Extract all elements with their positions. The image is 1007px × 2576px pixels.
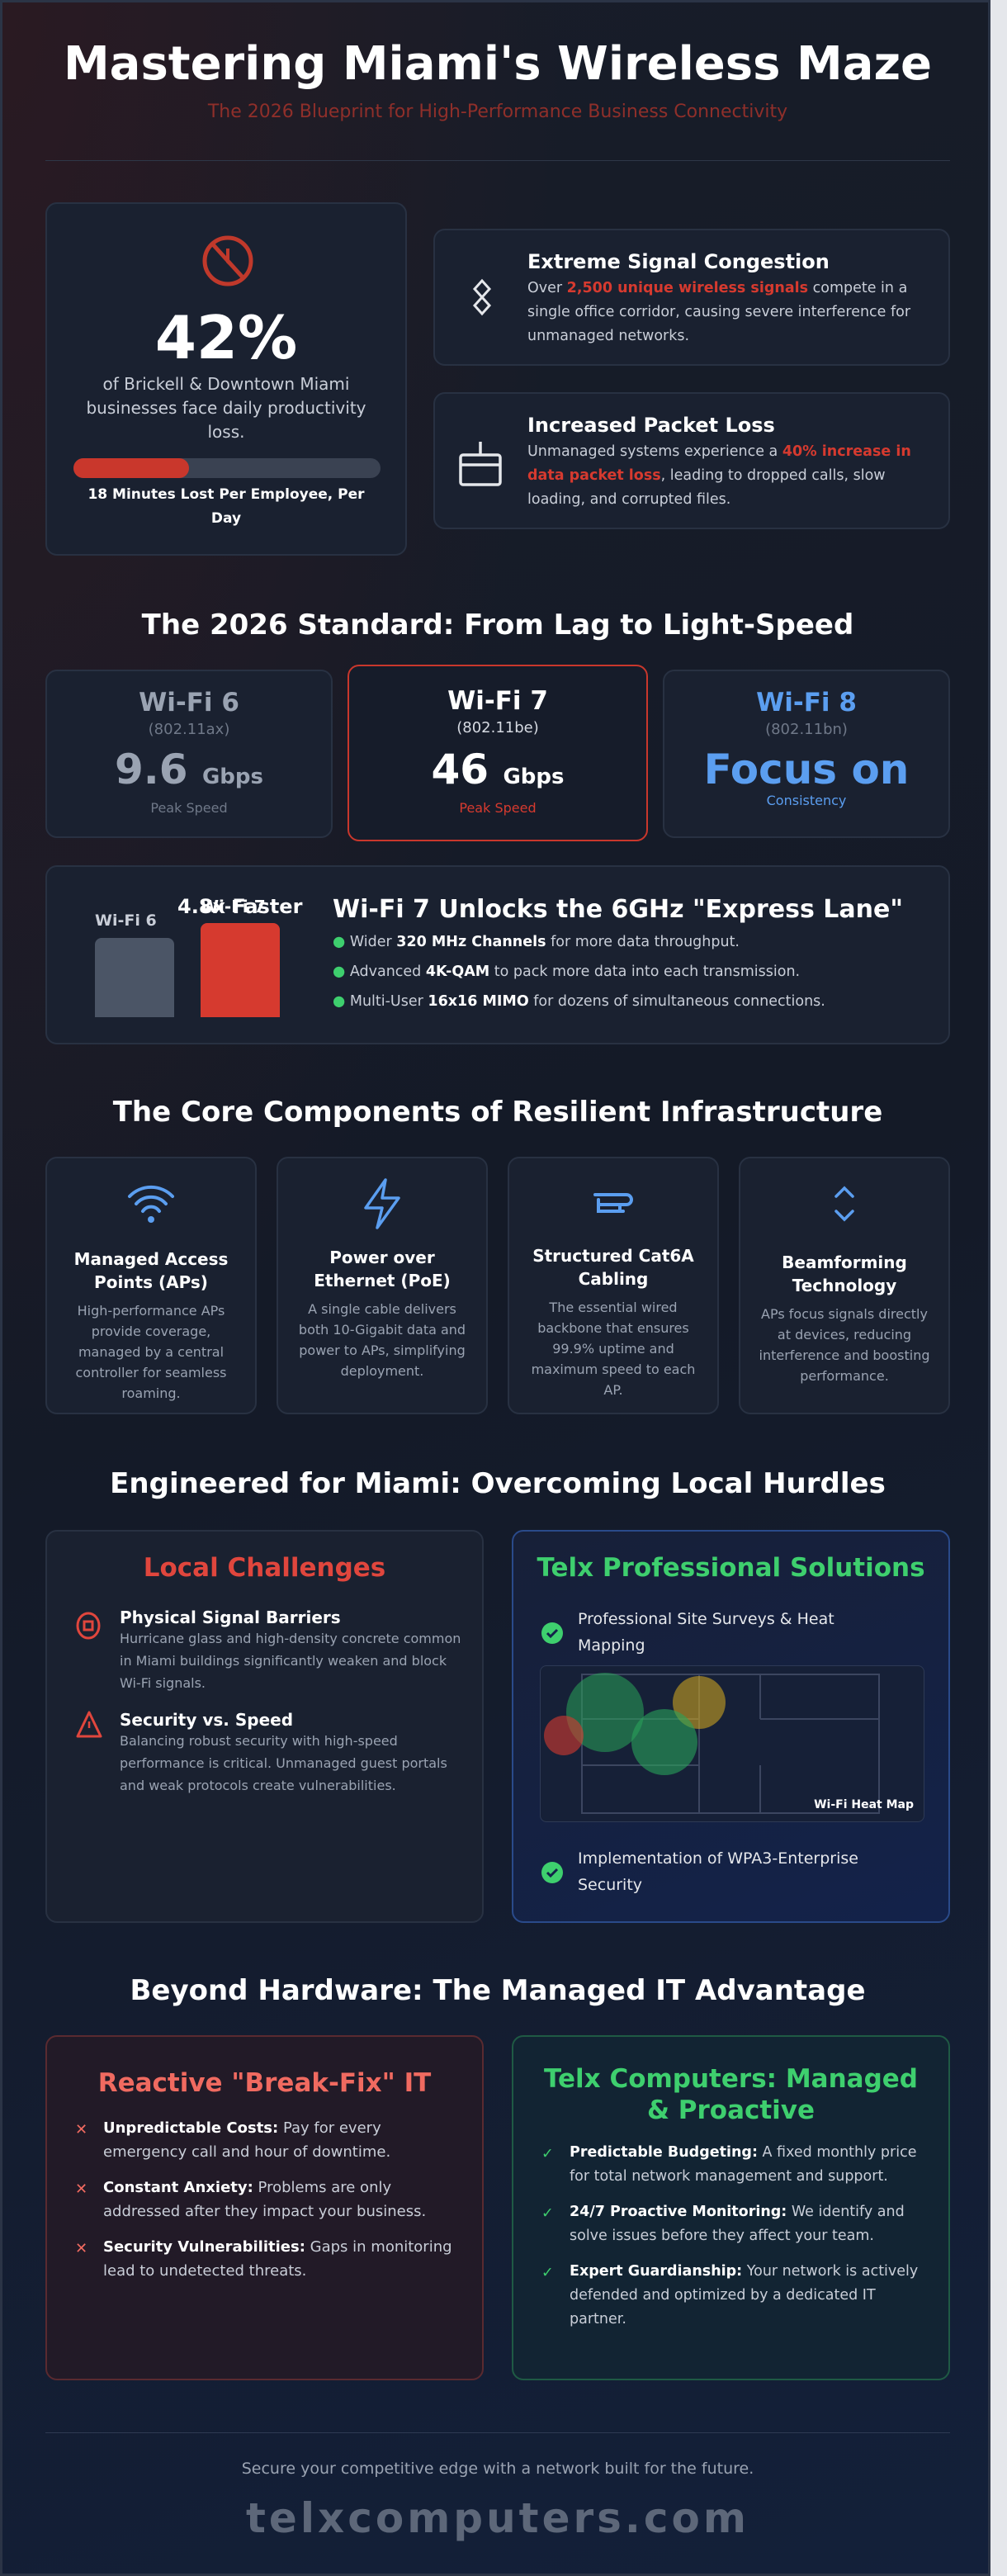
panel: telx solutions: [512, 1530, 950, 1923]
panel: packet loss: [433, 392, 950, 529]
icon: chevrons: [834, 1186, 854, 1222]
card: wifi 6: [45, 670, 333, 838]
card: access points: Managed Access Points (APs): [74, 1249, 228, 1292]
icon: no-clock: [203, 236, 253, 286]
list: break-fix issues: ✕: [75, 2240, 87, 2257]
card: wifi 8: Consistency: [767, 793, 846, 808]
challenge: security vs speed: [76, 1710, 447, 1793]
solution: WPA3: Implementation of WPA3-Enterprise Security: [578, 1849, 858, 1894]
challenge: physical barriers: [76, 1608, 461, 1691]
list: managed benefits: Predictable Budgeting: A fixed monthly price for total network management and support.: [570, 2144, 916, 2185]
card: PoE: A single cable delivers both 10-Gigabit data and power to APs, simplifying deployment.: [299, 1301, 466, 1379]
card: wifi 6: 9.6 Gbps: [115, 746, 263, 793]
card: wifi 8: [663, 670, 950, 838]
challenge: security vs speed: Security vs. Speed: [120, 1710, 293, 1730]
card: wifi 6: Wi-Fi 6: [139, 688, 239, 717]
card: wifi 7: [347, 665, 648, 841]
heading: engineered for miami: Engineered for Miami: Overcoming Local Hurdles: [110, 1467, 886, 1500]
panel: local challenges: Local Challenges: [144, 1553, 385, 1583]
express lane text: ● Advanced 4K-QAM to pack more data into each transmission.: [333, 964, 800, 980]
solution: site surveys: Professional Site Surveys & Heat Mapping: [578, 1610, 834, 1655]
subtitle: The 2026 Blueprint for High-Performance Business Connectivity: [208, 102, 787, 122]
card: wifi 6: (802.11ax): [149, 721, 229, 738]
icon: wifi: [127, 1186, 175, 1223]
list: break-fix issues: Security Vulnerabilities: Gaps in monitoring lead to undetected threats.: [103, 2238, 452, 2280]
list: break-fix issues: Constant Anxiety: Problems are only addressed after they impact your business.: [103, 2179, 426, 2220]
list: managed benefits: ✓: [541, 2146, 554, 2162]
panel: managed proactive: [512, 2035, 950, 2380]
list: break-fix issues: Unpredictable Costs: Pay for every emergency call and hour of downtime.: [103, 2119, 390, 2161]
panel: local challenges: [45, 1530, 484, 1923]
panel: telx solutions: Telx Professional Solutions: [537, 1553, 925, 1583]
footer url: telxcomputers.com: [246, 2494, 749, 2542]
express lane text: ● Multi-User 16x16 MIMO for dozens of simultaneous connections.: [333, 993, 825, 1010]
icon: signal: [473, 279, 491, 315]
list: managed benefits: [541, 2144, 918, 2327]
panel: signal congestion: [433, 229, 950, 366]
title: Mastering Miami's Wireless Maze: [64, 37, 932, 91]
bar chart: Wi-Fi 7: [201, 897, 266, 916]
panel: managed proactive: Telx Computers: Managed: [544, 2064, 918, 2094]
card: beamforming: Beamforming Technology: [782, 1252, 907, 1295]
card: wifi 7: Peak Speed: [459, 800, 537, 816]
heading: 2026 standard: The 2026 Standard: From Lag to Light-Speed: [142, 608, 853, 642]
panel: express lane: [45, 865, 950, 1044]
card: wifi 8: Wi-Fi 8: [756, 688, 857, 717]
card: cabling: [508, 1157, 719, 1414]
bar chart: [95, 895, 302, 1017]
challenge: physical barriers: Physical Signal Barriers: [120, 1608, 341, 1627]
heat map: [540, 1665, 924, 1822]
caption: 18 Minutes Lost Per Employee, Per Day: [87, 486, 365, 527]
list: break-fix issues: [75, 2119, 452, 2280]
card: wifi 6: Peak Speed: [150, 800, 228, 816]
footer tagline: Secure your competitive edge with a network built for the future.: [242, 2460, 754, 2478]
panel: packet loss: Unmanaged systems experience a 40% increase in data packet loss, leading to dropped calls, slow loading, and corrupted files.: [527, 443, 911, 508]
card: wifi 7: (802.11be): [456, 719, 539, 736]
panel: signal congestion: Over 2,500 unique wireless signals compete in a single office corridor, causing severe interference for unmanaged networks.: [527, 280, 910, 344]
panel: break-fix: Reactive "Break-Fix" IT: [98, 2068, 431, 2098]
card: access points: [45, 1157, 257, 1414]
list: break-fix issues: ✕: [75, 2121, 87, 2138]
list: break-fix issues: ✕: [75, 2181, 87, 2198]
card: PoE: Power over Ethernet (PoE): [314, 1248, 451, 1290]
bar chart: Wi-Fi 6: [95, 912, 157, 930]
card: beamforming: APs focus signals directly at devices, reducing interference and boosting performance.: [759, 1306, 929, 1384]
challenge: physical barriers: Hurricane glass and high-density concrete common in Miami buildings significantly weaken and block Wi-Fi signals.: [120, 1631, 461, 1691]
list: managed benefits: 24/7 Proactive Monitoring: We identify and solve issues before they affect your team.: [570, 2204, 905, 2244]
express lane text: Wi-Fi 7 Unlocks the 6GHz "Express Lane": [333, 895, 903, 924]
list: managed benefits: Expert Guardianship: Your network is actively defended and optimized by a dedicated IT partner.: [570, 2263, 918, 2327]
heading: beyond hardware: Beyond Hardware: The Managed IT Advantage: [130, 1974, 866, 2007]
icon: cable: [593, 1193, 633, 1213]
list: managed benefits: ✓: [541, 2205, 554, 2222]
challenge: security vs speed: Balancing robust security with high-speed performance is critical. Unmanaged guest portals and weak protocols create vulnerabilities.: [120, 1733, 447, 1793]
list: managed benefits: ✓: [541, 2265, 554, 2281]
panel: signal congestion: Extreme Signal Congestion: [527, 250, 830, 273]
express lane text: [333, 895, 903, 1010]
panel: break-fix: [45, 2035, 484, 2380]
card: PoE: [277, 1157, 488, 1414]
card: wifi 7: Wi-Fi 7: [447, 686, 548, 716]
card: wifi 8: (802.11bn): [765, 721, 848, 738]
express lane text: ● Wider 320 MHz Channels for more data throughput.: [333, 934, 740, 950]
icon: packet box: [459, 442, 502, 486]
progress bar: [73, 458, 381, 478]
card: access points: High-performance APs provide coverage, managed by a central controller for seamless roaming.: [75, 1303, 227, 1401]
big number: 42%: [155, 303, 297, 372]
card: cabling: Structured Cat6A Cabling: [532, 1246, 694, 1289]
panel: 42% stat: [45, 202, 407, 556]
card: wifi 8: Focus on: [704, 746, 909, 793]
panel: managed proactive: & Proactive: [647, 2095, 815, 2125]
icon: lightning: [364, 1178, 400, 1229]
card: wifi 7: 46 Gbps: [431, 746, 565, 793]
bar chart: 4.8x Faster: [177, 895, 302, 918]
card: beamforming: [739, 1157, 950, 1414]
heat map: Wi-Fi Heat Map: [814, 1798, 914, 1811]
panel: packet loss: Increased Packet Loss: [527, 414, 775, 437]
heading: core components: The Core Components of Resilient Infrastructure: [113, 1096, 882, 1129]
card: cabling: The essential wired backbone that ensures 99.9% uptime and maximum speed to each AP.: [532, 1300, 695, 1398]
description: of Brickell & Downtown Miami businesses face daily productivity loss.: [86, 374, 366, 442]
